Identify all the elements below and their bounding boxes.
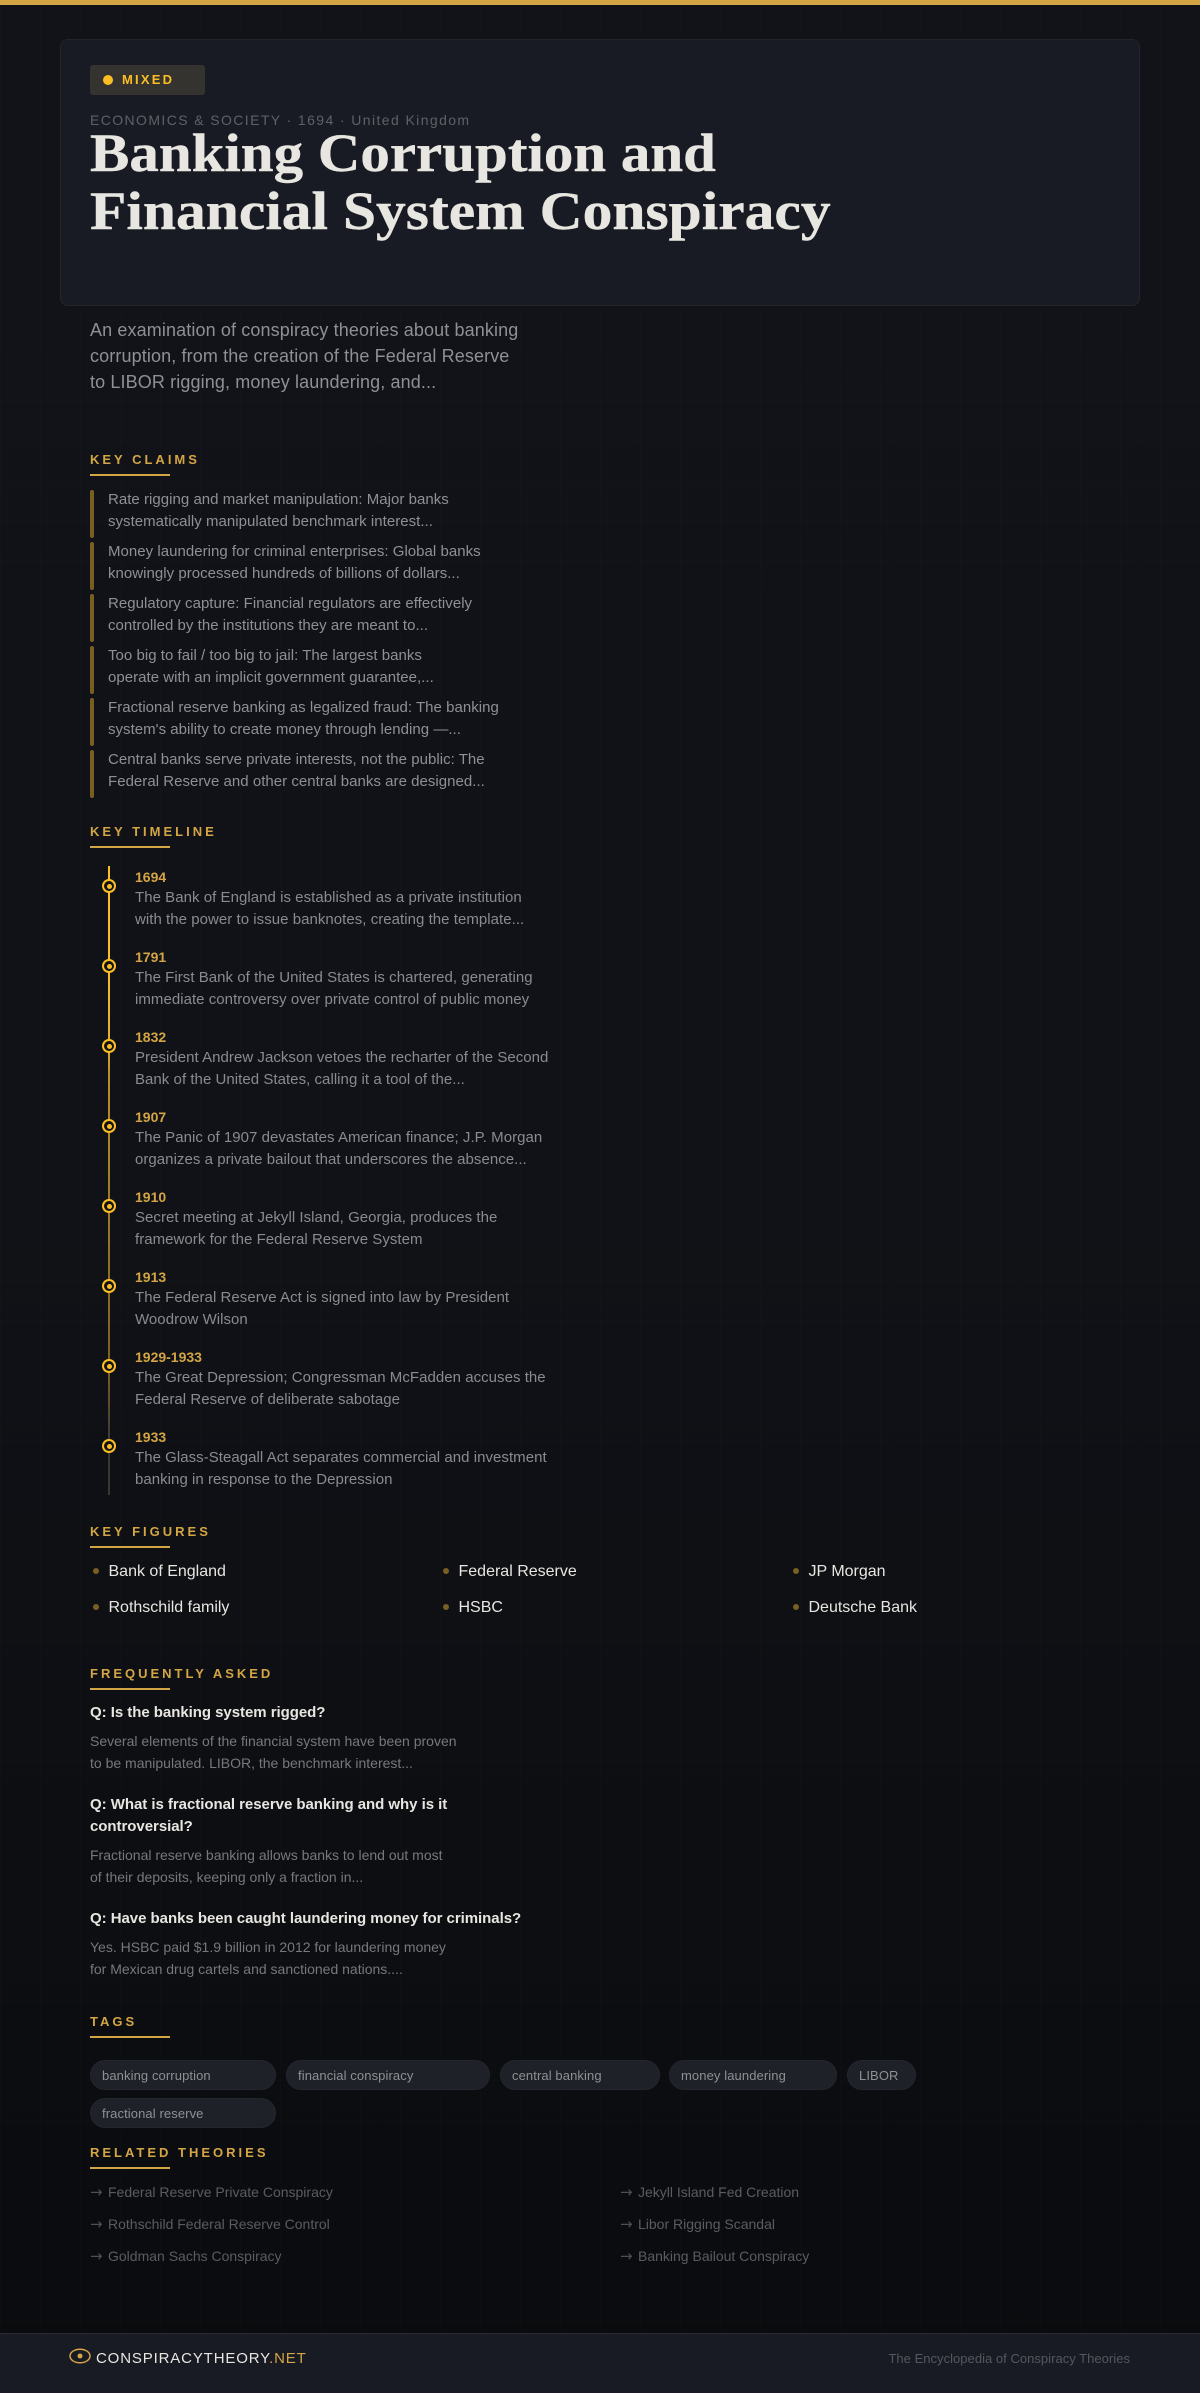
claim 1: Rate rigging and market manipulation: Major banks <box>108 491 449 508</box>
tag: LIBOR <box>859 2068 899 2083</box>
claim 2: knowingly processed hundreds of billions of dollars... <box>108 565 460 582</box>
brand name: CONSPIRACYTHEORY.NET <box>96 2350 307 2367</box>
event 1832 <box>102 1029 548 1088</box>
tag <box>669 2060 837 2090</box>
heading: key claims: KEY CLAIMS <box>90 452 200 467</box>
related link: → <box>90 2183 103 2201</box>
claim 4: Too big to fail / too big to jail: The largest banks <box>108 647 422 664</box>
tag <box>847 2060 916 2090</box>
faq 1 answer: Several elements of the financial system have been proven <box>90 1733 457 1749</box>
event 1913: Woodrow Wilson <box>135 1311 248 1328</box>
heading: key timeline: KEY TIMELINE <box>90 824 217 839</box>
event 1910 <box>102 1189 497 1248</box>
event 1907 <box>102 1109 542 1168</box>
related link: → <box>90 2247 103 2265</box>
panel: key figures <box>93 1563 917 1616</box>
badge dot <box>103 75 113 85</box>
figure: Deutsche Bank <box>808 1599 917 1616</box>
related link: Rothschild Federal Reserve Control <box>108 2216 330 2232</box>
faq 2 answer: of their deposits, keeping only a fraction in... <box>90 1869 363 1885</box>
lead text: corruption, from the creation of the Federal Reserve <box>90 346 509 366</box>
claim 5 <box>90 698 499 746</box>
related link: → <box>620 2247 633 2265</box>
related link: → <box>90 2215 103 2233</box>
faq 3 answer: for Mexican drug cartels and sanctioned nations.... <box>90 1961 403 1977</box>
tag: financial conspiracy <box>298 2068 413 2083</box>
claim 6: Federal Reserve and other central banks are designed... <box>108 773 485 790</box>
event 1694: 1694 <box>135 869 166 885</box>
title <box>90 123 831 241</box>
event 1929-1933: The Great Depression; Congressman McFadden accuses the <box>135 1369 546 1386</box>
event 1832: President Andrew Jackson vetoes the recharter of the Second <box>135 1049 548 1066</box>
related link: Banking Bailout Conspiracy <box>638 2248 809 2264</box>
heading: tags: TAGS <box>90 2014 137 2029</box>
figure: Bank of England <box>108 1563 226 1580</box>
event 1791: The First Bank of the United States is chartered, generating <box>135 969 533 986</box>
figure: Federal Reserve <box>458 1563 577 1580</box>
claim 5: system's ability to create money through lending —... <box>108 721 461 738</box>
related link: → <box>620 2215 633 2233</box>
title: Financial System Conspiracy <box>90 181 831 241</box>
footer <box>0 2333 1200 2393</box>
lead text: An examination of conspiracy theories about banking <box>90 320 518 340</box>
figure: HSBC <box>458 1599 503 1616</box>
event 1929-1933: 1929-1933 <box>135 1349 202 1365</box>
icon: eye logo <box>69 2348 91 2364</box>
tag: money laundering <box>681 2068 786 2083</box>
faq 2 question: controversial? <box>90 1818 193 1835</box>
heading: key figures: KEY FIGURES <box>90 1524 211 1539</box>
tag <box>500 2060 660 2090</box>
badge label: MIXED <box>122 72 174 87</box>
event 1933: 1933 <box>135 1429 166 1445</box>
faq 2 answer <box>90 1847 443 1885</box>
claim 2 <box>90 542 481 590</box>
event 1933 <box>102 1429 547 1488</box>
figure: Rothschild family <box>108 1599 229 1616</box>
event 1913 <box>102 1269 509 1328</box>
badge: mixed <box>90 65 205 95</box>
event 1929-1933 <box>102 1349 546 1408</box>
lead text <box>90 320 518 392</box>
event 1907: The Panic of 1907 devastates American finance; J.P. Morgan <box>135 1129 542 1146</box>
tag <box>90 2060 276 2090</box>
claim 6 <box>90 750 485 798</box>
faq 3 question: Q: Have banks been caught laundering money for criminals? <box>90 1910 521 1927</box>
event 1832: Bank of the United States, calling it a tool of the... <box>135 1071 465 1088</box>
event 1694 <box>102 869 524 928</box>
faq 1 answer: to be manipulated. LIBOR, the benchmark interest... <box>90 1755 413 1771</box>
claim 6: Central banks serve private interests, not the public: The <box>108 751 485 768</box>
panel: faq <box>90 1704 521 1977</box>
claim 5: Fractional reserve banking as legalized fraud: The banking <box>108 699 499 716</box>
panel: tags <box>90 2060 916 2128</box>
event 1694: with the power to issue banknotes, creating the template... <box>135 911 524 928</box>
faq 3 answer: Yes. HSBC paid $1.9 billion in 2012 for laundering money <box>90 1939 446 1955</box>
claim 1: systematically manipulated benchmark interest... <box>108 513 433 530</box>
lead text: to LIBOR rigging, money laundering, and... <box>90 372 436 392</box>
related link: Libor Rigging Scandal <box>638 2216 775 2232</box>
meta line: ECONOMICS & SOCIETY · 1694 · United Kingdom <box>90 112 470 128</box>
tagline: The Encyclopedia of Conspiracy Theories <box>888 2351 1130 2366</box>
claim 3: Regulatory capture: Financial regulators are effectively <box>108 595 472 612</box>
figure: JP Morgan <box>808 1563 886 1580</box>
claim 4: operate with an implicit government guarantee,... <box>108 669 434 686</box>
tag: banking corruption <box>102 2068 211 2083</box>
hero panel <box>60 39 1140 306</box>
event 1933: banking in response to the Depression <box>135 1471 392 1488</box>
event 1791: immediate controversy over private control of public money <box>135 991 529 1008</box>
faq 2 answer: Fractional reserve banking allows banks to lend out most <box>90 1847 443 1863</box>
title: Banking Corruption and <box>90 123 716 183</box>
panel: key claims <box>90 490 499 798</box>
heading: frequently asked: FREQUENTLY ASKED <box>90 1666 273 1681</box>
faq 2 question <box>90 1796 448 1835</box>
claim 2: Money laundering for criminal enterprises: Global banks <box>108 543 481 560</box>
timeline line <box>108 866 110 1495</box>
top accent bar <box>0 0 1200 5</box>
event 1933: The Glass-Steagall Act separates commercial and investment <box>135 1449 547 1466</box>
event 1910: 1910 <box>135 1189 166 1205</box>
panel: timeline <box>102 869 548 1488</box>
faq 1 question: Q: Is the banking system rigged? <box>90 1704 325 1721</box>
event 1694: The Bank of England is established as a private institution <box>135 889 522 906</box>
event 1832: 1832 <box>135 1029 166 1045</box>
event 1913: The Federal Reserve Act is signed into law by President <box>135 1289 509 1306</box>
faq 3 answer <box>90 1939 446 1977</box>
tag <box>90 2098 276 2128</box>
event 1910: framework for the Federal Reserve System <box>135 1231 423 1248</box>
heading: related theories: RELATED THEORIES <box>90 2145 268 2160</box>
claim 4 <box>90 646 434 694</box>
faq 1 answer <box>90 1733 457 1771</box>
related link: Jekyll Island Fed Creation <box>638 2184 799 2200</box>
related link: Federal Reserve Private Conspiracy <box>108 2184 333 2200</box>
related link: → <box>620 2183 633 2201</box>
event 1907: organizes a private bailout that underscores the absence... <box>135 1151 527 1168</box>
tag: fractional reserve <box>102 2106 204 2121</box>
tag <box>286 2060 490 2090</box>
event 1929-1933: Federal Reserve of deliberate sabotage <box>135 1391 400 1408</box>
event 1791: 1791 <box>135 949 166 965</box>
related link: Goldman Sachs Conspiracy <box>108 2248 282 2264</box>
claim 3: controlled by the institutions they are meant to... <box>108 617 428 634</box>
claim 3 <box>90 594 472 642</box>
event 1913: 1913 <box>135 1269 166 1285</box>
faq 2 question: Q: What is fractional reserve banking and why is it <box>90 1796 447 1813</box>
panel: related theories <box>90 2183 810 2265</box>
claim 1 <box>90 490 449 538</box>
tag: central banking <box>512 2068 602 2083</box>
event 1910: Secret meeting at Jekyll Island, Georgia, produces the <box>135 1209 497 1226</box>
event 1907: 1907 <box>135 1109 166 1125</box>
event 1791 <box>102 949 533 1008</box>
